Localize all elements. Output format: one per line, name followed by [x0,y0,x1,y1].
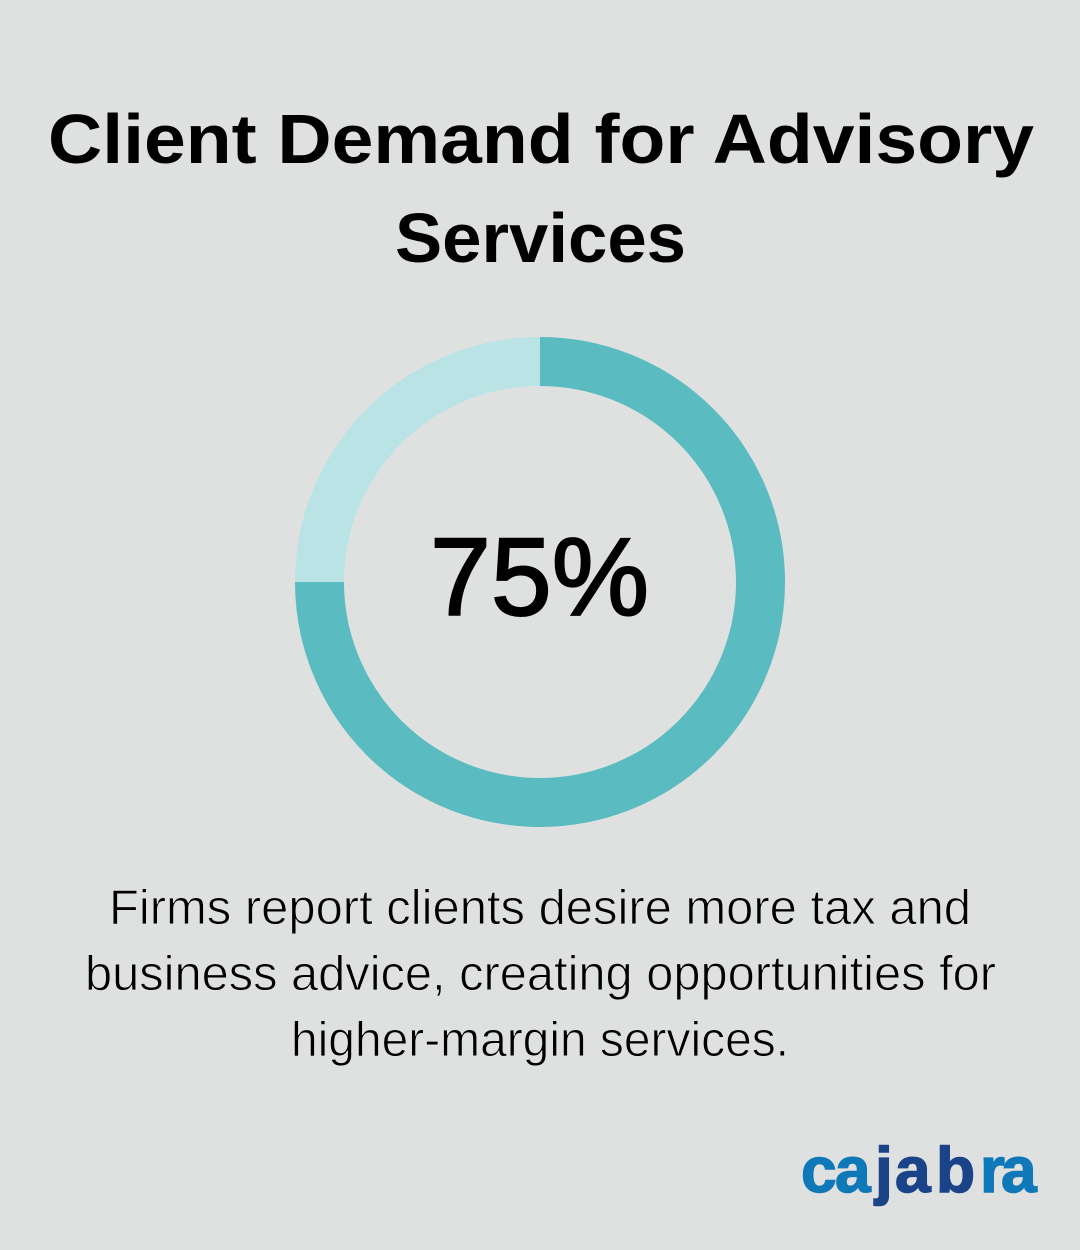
logo: cajabra: a [835,1134,871,1206]
logo: cajabra [801,1134,1037,1206]
logo: cajabra: c [801,1134,837,1206]
logo: cajabra: a [895,1134,931,1206]
logo: cajabra: r [980,1134,1005,1206]
description text: higher-margin services. [291,1013,789,1067]
description text [85,881,996,1067]
title [48,100,1034,277]
description text: Firms report clients desire more tax and [109,881,971,935]
donut value: 75% [430,516,649,639]
title: Services [395,199,686,277]
logo: cajabra: a [1001,1134,1037,1206]
donut chart: 75% [320,362,760,802]
description text: business advice, creating opportunities for [85,947,996,1001]
logo: cajabra: b [936,1134,975,1206]
logo: cajabra: j [874,1134,893,1206]
title: Client Demand for Advisory [48,100,1034,178]
